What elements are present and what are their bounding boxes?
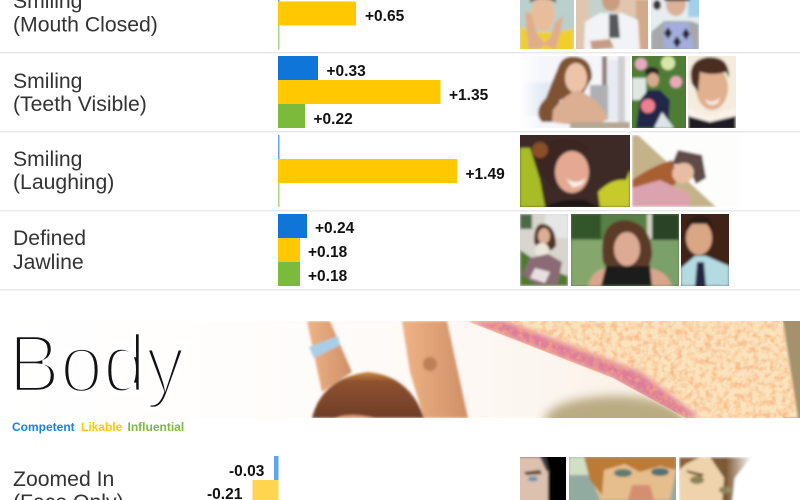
photo: woman with curly hair <box>526 56 630 128</box>
row: defined jawline <box>13 208 735 293</box>
value: +0.18: +0.18 <box>308 244 348 261</box>
divider <box>0 131 800 132</box>
label: smiling teeth visible: (Teeth Visible) <box>13 93 147 116</box>
photo: woman's eyes close-up <box>569 457 676 500</box>
row: smiling teeth visible <box>13 50 742 135</box>
photo: laughing woman in cowboy hat <box>632 135 717 207</box>
photo: man in blue shirt <box>681 214 729 286</box>
row: smiling laughing <box>13 130 746 215</box>
heading: body: Body <box>8 317 185 410</box>
value: +0.33: +0.33 <box>326 63 366 80</box>
value: +1.49: +1.49 <box>466 166 505 183</box>
bars: smiling laughing <box>278 135 457 207</box>
photo: woman with flowers <box>632 56 686 128</box>
legend: influential: Influential <box>128 420 184 434</box>
bars: smiling mouth closed <box>278 0 356 50</box>
photos: zoomed in <box>514 450 758 500</box>
bars: defined jawline <box>278 214 307 286</box>
row: zoomed in <box>13 450 758 500</box>
photo: woman in yellow <box>520 0 574 49</box>
photo: man in white shirt <box>576 0 648 49</box>
label: smiling laughing: (Laughing) <box>13 171 114 194</box>
divider <box>0 52 800 54</box>
photo: man reading a book <box>688 56 736 128</box>
legend: likable: Likable <box>81 420 123 434</box>
label: defined jawline: Jawline <box>13 251 84 274</box>
bars: smiling teeth visible <box>278 56 440 128</box>
value: +0.22: +0.22 <box>314 111 353 128</box>
banner: body <box>16 321 800 418</box>
label: defined jawline: Defined <box>13 227 86 250</box>
photo: woman with dog <box>520 214 568 286</box>
value: +0.65: +0.65 <box>365 8 405 25</box>
value: +0.18: +0.18 <box>308 268 348 285</box>
photo: laughing woman with dark hair <box>520 135 630 207</box>
banner photo <box>305 321 800 418</box>
divider <box>0 210 800 212</box>
photos: smiling mouth closed <box>515 0 705 55</box>
photo: woman in argyle sweater <box>651 0 699 49</box>
label: smiling laughing: Smiling <box>13 148 82 171</box>
photos: defined jawline <box>514 208 735 293</box>
value: +0.24: +0.24 <box>315 220 355 237</box>
value: -0.03: -0.03 <box>229 463 265 480</box>
divider <box>0 289 800 290</box>
row: smiling mouth closed <box>13 0 705 55</box>
photos: smiling teeth visible <box>515 50 742 135</box>
photos: smiling laughing <box>515 130 746 215</box>
photo: woman's face close-up <box>679 457 750 500</box>
bars: zoomed in <box>252 456 278 500</box>
photo: woman in garden <box>571 214 679 286</box>
legend <box>12 420 184 434</box>
photo: man's face close-up <box>520 457 566 500</box>
value: +1.35: +1.35 <box>449 87 489 104</box>
label: zoomed in: Zoomed In <box>13 468 114 491</box>
label: smiling teeth visible: Smiling <box>13 70 82 93</box>
legend: competent: Competent <box>12 420 75 434</box>
label: smiling mouth closed: (Mouth Closed) <box>13 14 158 36</box>
